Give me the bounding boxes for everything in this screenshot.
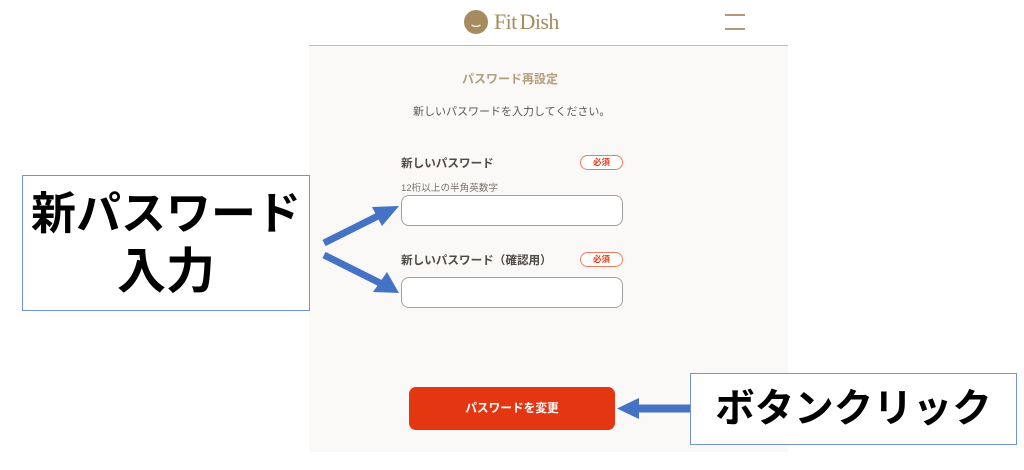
page heading: パスワード再設定 xyxy=(462,72,558,86)
icon: smiling logo circle xyxy=(464,10,488,34)
badge: required xyxy=(580,155,623,170)
badge: required: 必須 xyxy=(593,157,610,167)
input: confirm password xyxy=(401,277,623,308)
panel: password reset page xyxy=(309,0,788,452)
callout: click button xyxy=(690,373,1017,445)
input: new password xyxy=(401,195,623,226)
button: change password xyxy=(409,387,615,430)
icon: hamburger menu xyxy=(725,14,745,30)
callout: enter new password: 入力 xyxy=(117,245,215,299)
badge: required xyxy=(580,252,623,267)
callout: click button: ボタンクリック xyxy=(715,387,992,431)
callout: enter new password xyxy=(22,175,310,311)
arrow: to change button xyxy=(617,398,690,419)
callout: enter new password: 新パスワード xyxy=(31,188,301,239)
button: change password: パスワードを変更 xyxy=(465,402,559,415)
arrow: to new password field xyxy=(324,206,399,243)
badge: required: 必須 xyxy=(593,254,610,264)
field label: new password: 新しいパスワード xyxy=(401,157,494,170)
logo wordmark: Fit Dish xyxy=(494,9,559,34)
page header xyxy=(309,0,788,46)
logo: Fit Dish xyxy=(464,9,560,34)
field hint: 12桁以上の半角英数字 xyxy=(401,183,498,194)
arrow: to confirm field xyxy=(324,255,399,293)
field label: confirm password: 新しいパスワード（確認用） xyxy=(401,254,552,267)
instruction text: 新しいパスワードを入力してください。 xyxy=(413,106,610,118)
